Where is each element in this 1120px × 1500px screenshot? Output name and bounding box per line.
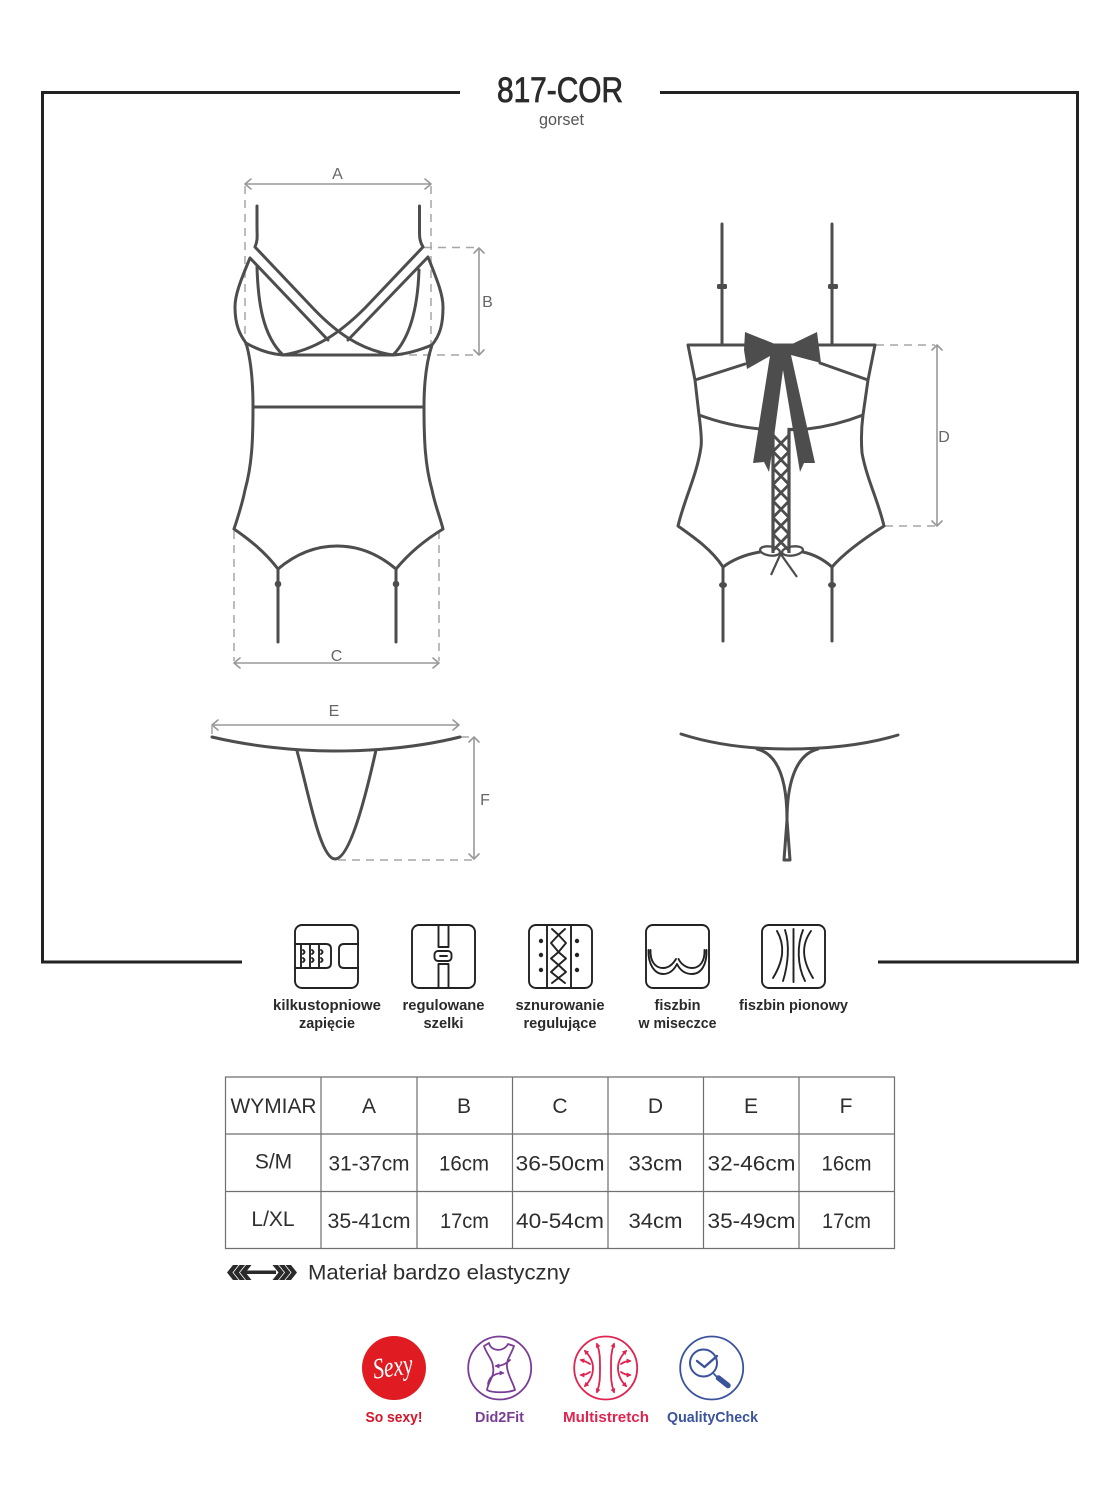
size table (226, 1077, 894, 1248)
header row: F (840, 1095, 852, 1118)
row L/XL: 34cm (628, 1210, 682, 1233)
garter clip right (828, 582, 836, 588)
badge: Did2Fit (468, 1336, 531, 1400)
row L/XL: 40-54cm (516, 1210, 604, 1233)
row S/M: S/M (255, 1150, 292, 1174)
icon: multi-step hook closure (295, 925, 358, 988)
row L/XL: 17cm (440, 1210, 489, 1233)
title: 817-COR (497, 71, 623, 110)
badge: QualityCheck (680, 1336, 743, 1400)
thong front outline (212, 737, 460, 859)
thong back drawing (681, 734, 898, 860)
corset back outline (678, 224, 884, 641)
row S/M: 33cm (628, 1152, 682, 1176)
header row: C (552, 1095, 568, 1118)
dimension B (395, 248, 493, 355)
icon: vertical boning (762, 925, 825, 988)
label: sznurowanie regulujące: regulujące (524, 1015, 596, 1032)
badge label: Did2Fit: Did2Fit (475, 1409, 524, 1426)
table grid (226, 1077, 894, 1248)
dimension E (212, 703, 459, 737)
badge: So sexy (362, 1336, 426, 1400)
icon: stretch arrow (227, 1265, 297, 1280)
badge label: So sexy!: So sexy! (366, 1409, 422, 1426)
dimension C: C (331, 648, 342, 665)
garter clip left (275, 581, 281, 587)
header row: B (457, 1095, 471, 1118)
icon: adjustable straps (412, 925, 475, 988)
dimension B: B (482, 294, 493, 311)
label: kilkustopniowe zapięcie: zapięcie (299, 1015, 355, 1032)
badge label: QualityCheck: QualityCheck (667, 1409, 759, 1426)
header row: WYMIAR (230, 1095, 316, 1118)
dimension D (876, 345, 950, 526)
label: fiszbin pionowy: fiszbin pionowy (739, 997, 849, 1014)
strap slider left (717, 284, 727, 289)
badge: So sexy: Sexy (371, 1348, 415, 1386)
stretch note: Materiał bardzo elastyczny (308, 1262, 571, 1284)
label: fiszbin w miseczce: w miseczce (638, 1015, 716, 1032)
row L/XL: L/XL (251, 1208, 295, 1231)
row S/M (255, 1150, 872, 1176)
row L/XL: 17cm (822, 1210, 871, 1233)
dimension D: D (938, 429, 950, 446)
badge label: Multistretch: Multistretch (563, 1409, 649, 1426)
lacing (759, 430, 804, 577)
row S/M: 32-46cm (708, 1152, 796, 1176)
corset front drawing (234, 166, 493, 668)
row S/M: 36-50cm (516, 1152, 604, 1176)
dimension A (245, 166, 431, 345)
label: sznurowanie regulujące: sznurowanie (516, 997, 604, 1014)
header row: D (648, 1095, 663, 1118)
dimension F: F (480, 792, 490, 809)
header row: E (744, 1095, 758, 1118)
row S/M: 16cm (439, 1152, 489, 1176)
bow (744, 332, 821, 472)
label: fiszbin w miseczce: fiszbin (654, 997, 700, 1014)
subtitle: gorset (539, 110, 584, 129)
row S/M: 31-37cm (328, 1152, 410, 1176)
icon: cup underwire (646, 925, 709, 988)
badge: Multistretch (574, 1336, 637, 1400)
header row: A (362, 1095, 376, 1118)
row S/M: 16cm (822, 1152, 872, 1176)
header row (230, 1095, 852, 1118)
frame border (42, 92, 1078, 962)
label: kilkustopniowe zapięcie: kilkustopniowe (273, 997, 381, 1014)
row L/XL: 35-49cm (708, 1210, 796, 1233)
label: regulowane szelki: regulowane (402, 997, 484, 1014)
icon: adjustable lacing (529, 925, 592, 988)
strap slider right (828, 284, 838, 289)
dimension A: A (332, 166, 343, 183)
label: regulowane szelki: szelki (424, 1015, 464, 1032)
dimension E: E (329, 703, 339, 720)
dimension C (234, 531, 439, 668)
garter clip right (393, 581, 399, 587)
thong front drawing (212, 703, 490, 860)
row L/XL (251, 1208, 871, 1233)
garter clip left (719, 582, 727, 588)
row L/XL: 35-41cm (328, 1210, 410, 1233)
corset back drawing (678, 224, 950, 641)
dimension F (338, 737, 490, 860)
corset front outline (234, 206, 443, 642)
